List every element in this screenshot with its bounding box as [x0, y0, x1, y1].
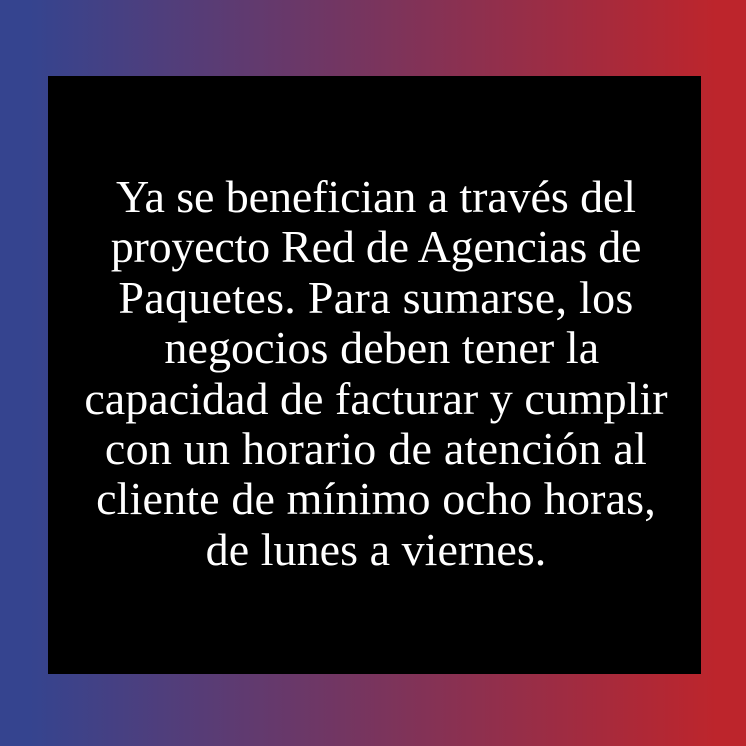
text block: main paragraph: proyecto Red de Agencias de [111, 221, 641, 272]
text block: main paragraph: cliente de mínimo ocho horas, [96, 473, 656, 524]
text block: main paragraph: negocios deben tener la [164, 322, 599, 373]
text block: main paragraph: capacidad de facturar y cumplir [84, 373, 668, 424]
text block: main paragraph: Paquetes. Para sumarse, los [118, 272, 634, 323]
text block: main paragraph: con un horario de atención al [105, 423, 647, 474]
panel: black text panel [48, 76, 701, 674]
text block: main paragraph [84, 171, 668, 575]
text block: main paragraph: de lunes a viernes. [206, 524, 546, 575]
text block: main paragraph: Ya se benefician a través del [116, 171, 636, 222]
